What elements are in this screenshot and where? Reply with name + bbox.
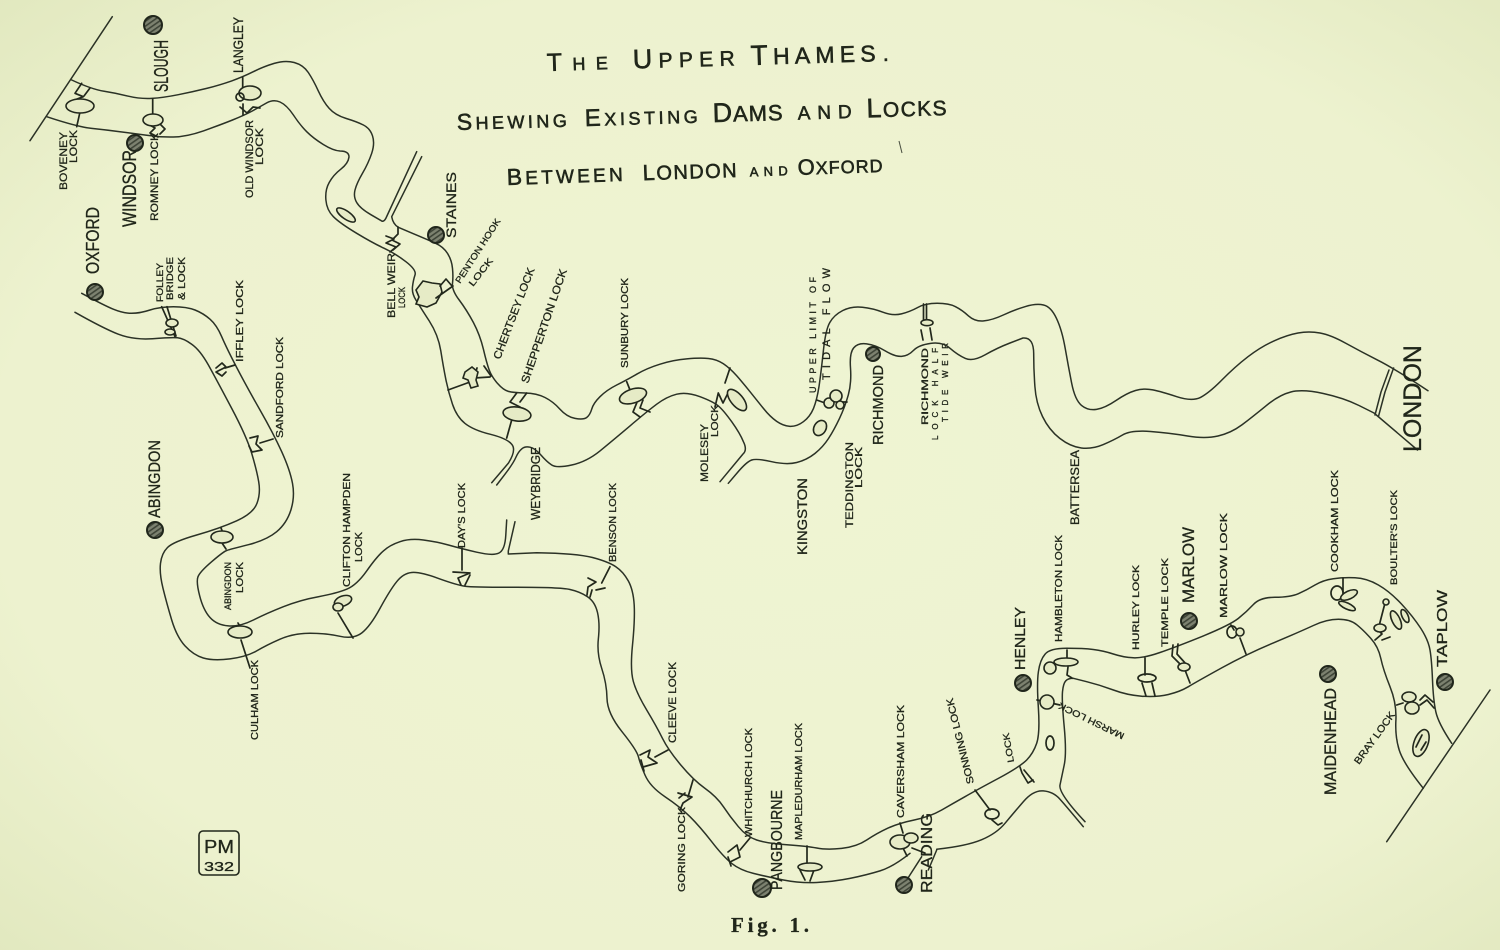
heading line 1: [546, 36, 889, 77]
label: Henley: HENLEY: [1012, 607, 1029, 670]
Oxford reach: upper bank: [82, 293, 507, 626]
lock: Chertsey: [448, 366, 491, 390]
label: Tidal flow: TIDAL FLOW: [821, 267, 833, 380]
label: Richmond lock line 2: LOCK HALF: [931, 348, 940, 440]
label: Hurley lock: HURLEY LOCK: [1131, 565, 1141, 650]
locks and weirs: [66, 77, 1434, 881]
label: Bell Weir lock: LOCK: [397, 287, 407, 308]
label: Boveney: BOVENEY: [58, 131, 70, 190]
island: Staines reach: [335, 205, 357, 225]
lock: Iffley: [216, 363, 235, 376]
heading line 3: [506, 151, 883, 190]
marker: Slough: [144, 16, 162, 34]
stray mark: [899, 141, 902, 153]
heading line 2: AND: [797, 102, 852, 125]
heading line 1: .: [882, 41, 889, 66]
Henley to Bray: south bank: [1060, 619, 1423, 822]
label: Slough: SLOUGH: [151, 40, 173, 92]
lock: Shepperton: [502, 393, 532, 438]
north bank: Staines to London: [392, 157, 1428, 426]
label: Cleeve lock: CLEEVE LOCK: [667, 661, 679, 743]
Reading connector lines: [907, 850, 937, 880]
marker: Staines: [428, 227, 444, 243]
label: Oxford: OXFORD: [83, 207, 103, 274]
island: Taplow: [1410, 727, 1432, 759]
marker: Taplow: [1437, 674, 1453, 690]
heading line 2: SHEWING: [456, 106, 567, 135]
label: Staines: STAINES: [443, 172, 459, 238]
heading line 1: THAMES: [750, 36, 876, 71]
label: Benson lock: BENSON LOCK: [608, 483, 619, 562]
lock: Day's: [453, 548, 470, 585]
marker: Henley: [1015, 675, 1031, 691]
lock: Old Windsor: [236, 77, 261, 115]
lock: Teddington: [811, 390, 847, 438]
label: Folley: FOLLEY: [155, 263, 165, 302]
label: Sunbury lock: SUNBURY LOCK: [620, 278, 631, 368]
label: Whitchurch lock: WHITCHURCH LOCK: [744, 728, 755, 837]
lock: Sandford: [249, 436, 273, 452]
label: Teddington lock: LOCK: [854, 447, 865, 488]
lock: Benson: [587, 567, 610, 597]
label: Boulter's lock: BOULTER'S LOCK: [1389, 490, 1399, 585]
label: Temple lock: TEMPLE LOCK: [1160, 558, 1170, 647]
label: Bray lock: BRAY LOCK: [1353, 710, 1398, 767]
heading line 2: LOCKS: [866, 91, 947, 123]
lock: Folley Bridge: [162, 307, 178, 337]
caption: Fig. 1.: [731, 913, 809, 937]
lock: Caversham: [890, 823, 925, 856]
label: Old Windsor lock: LOCK: [254, 127, 266, 165]
label: Old Windsor: OLD WINDSOR: [244, 120, 256, 198]
Reading to Loddon: south bank: [937, 791, 1083, 849]
label: London: LONDON: [1399, 345, 1427, 452]
label: Day's lock: DAY'S LOCK: [457, 483, 468, 548]
stamp number: 332: [204, 859, 234, 874]
label: Maidenhead: MAIDENHEAD: [1321, 688, 1340, 795]
label: Molesey lock: LOCK: [710, 405, 721, 437]
label: Pangbourne: PANGBOURNE: [769, 790, 786, 890]
label: Molesey: MOLESEY: [699, 423, 711, 482]
label: Marlow lock: MARLOW LOCK: [1219, 513, 1230, 618]
lock: Penton Hook: [416, 279, 453, 307]
label: Abingdon: ABINGDON: [145, 440, 164, 518]
label: Langley: LANGLEY: [230, 16, 246, 73]
label: Penton Hook: PENTON HOOK: [453, 217, 503, 285]
lock: Temple: [1172, 644, 1190, 683]
label: Taplow: TAPLOW: [1434, 589, 1451, 667]
south bank: London to Kingston: [728, 338, 1418, 483]
heading line 3: LONDON: [642, 157, 737, 185]
lock: Goring: [678, 780, 693, 810]
south bank: Mole to Weybridge: [497, 393, 745, 485]
label: Sonning lock: SONNING LOCK: [945, 697, 977, 785]
lock: Molesey: [715, 368, 750, 414]
label: Hambleton lock: HAMBLETON LOCK: [1054, 535, 1065, 642]
label: Clifton Hampden lock: LOCK: [354, 532, 365, 562]
lock: Sonning: [975, 790, 1002, 825]
north bank: Windsor reach to Staines reach: [72, 61, 417, 221]
label: Goring lock: GORING LOCK: [677, 807, 688, 892]
label: Richmond lock line 1: RICHMOND: [920, 347, 930, 425]
lock: Shiplake: [1020, 767, 1034, 783]
marker: Pangbourne: [753, 879, 771, 897]
label: Bridge: BRIDGE: [165, 257, 175, 300]
stamp border: [199, 831, 239, 875]
heading line 3: AND: [749, 163, 788, 180]
lock: Romney: [143, 99, 165, 137]
label: Culham lock: CULHAM LOCK: [250, 660, 261, 740]
marker: Oxford: [87, 284, 103, 300]
heading line 1: T HE: [546, 47, 608, 77]
marker: Richmond: [866, 347, 880, 361]
label: Mapledurham lock: MAPLEDURHAM LOCK: [794, 723, 805, 840]
lock: Marsh: [1037, 695, 1060, 750]
lock: Cleeve: [640, 750, 668, 771]
lock: Sunbury: [618, 382, 650, 417]
label: Iffley lock: IFFLEY LOCK: [235, 280, 246, 362]
lock: Abingdon: [211, 528, 233, 549]
bridge: London: [1375, 368, 1394, 417]
label: Abingdon lock: ABINGDON: [223, 562, 233, 610]
title: [456, 36, 947, 190]
label: Richmond: RICHMOND: [870, 365, 887, 445]
label: Caversham lock: CAVERSHAM LOCK: [896, 705, 907, 818]
lock: Hambleton: [1044, 650, 1078, 678]
label: Richmond lock line 3: TIDE WEIR: [941, 343, 950, 422]
label: Cookham lock: COOKHAM LOCK: [1330, 470, 1341, 572]
label: Shepperton lock: SHEPPERTON LOCK: [519, 267, 570, 385]
lock: Boulter's: [1374, 599, 1411, 640]
marker: Reading: [896, 877, 912, 893]
lock: Boveney: [66, 83, 94, 127]
lock: Clifton Hampden: [333, 593, 353, 638]
label: Marlow: MARLOW: [1179, 527, 1198, 603]
lock: Bray: [1397, 692, 1434, 714]
boundary line: upper map break: [30, 17, 112, 141]
label: Windsor: WINDSOR: [120, 150, 141, 227]
Oxford reach: lower bank: [75, 312, 910, 883]
lock: Hurley: [1138, 658, 1156, 696]
label: Teddington: TEDDINGTON: [844, 442, 856, 528]
marker: Abingdon: [147, 522, 163, 538]
heading line 2: [456, 91, 947, 136]
label: Penton Hook lock: LOCK: [467, 256, 495, 288]
lock: Culham: [228, 623, 252, 668]
lock: Mapledurham: [798, 846, 822, 881]
heading line 2: EXISTING: [584, 102, 698, 132]
marker: Marlow: [1181, 613, 1197, 629]
Benson to Taplow: upper bank: [508, 522, 1452, 849]
label: Boveney lock: LOCK: [68, 129, 80, 163]
lock: Cookham: [1331, 578, 1359, 613]
heading line 3: BETWEEN: [506, 160, 623, 190]
label: Marsh lock: MARSH LOCK: [1057, 701, 1126, 741]
boundary line: lower map break: [1387, 690, 1490, 842]
label: Weybridge: WEYBRIDGE: [528, 447, 543, 520]
label: Romney lock: ROMNEY LOCK: [149, 132, 161, 221]
heading line 1: U PPER: [632, 41, 735, 74]
marker: Windsor: [127, 135, 143, 151]
marker: Maidenhead: [1320, 666, 1336, 682]
label: & lock: & LOCK: [177, 257, 188, 300]
label: Upper limit of: UPPER LIMIT OF: [808, 276, 818, 393]
south bank: Weybridge to Boveney: [47, 101, 514, 483]
label: Clifton Hampden: CLIFTON HAMPDEN: [342, 473, 353, 587]
lock: Bell Weir: [386, 227, 400, 252]
heading line 3: OXFORD: [797, 152, 883, 180]
lock: Marlow: [1227, 625, 1246, 654]
label: Reading: READING: [919, 813, 936, 893]
stamp monogram: PM: [204, 837, 234, 857]
label: Battersea: BATTERSEA: [1068, 450, 1082, 525]
heading line 2: DAMS: [712, 96, 783, 128]
stamp: plate mark: [199, 831, 239, 875]
lock: Whitchurch: [728, 838, 750, 866]
lock: Richmond half tide weir: [921, 304, 933, 340]
label: Bell Weir: BELL WEIR: [386, 253, 398, 318]
label: Chertsey lock: CHERTSEY LOCK: [492, 266, 538, 361]
label: Shiplake lock: LOCK: [1001, 732, 1016, 763]
label: Sandford lock: SANDFORD LOCK: [275, 337, 286, 438]
label: Kingston: KINGSTON: [794, 478, 810, 555]
label: Abingdon lock second line: LOCK: [235, 562, 246, 593]
